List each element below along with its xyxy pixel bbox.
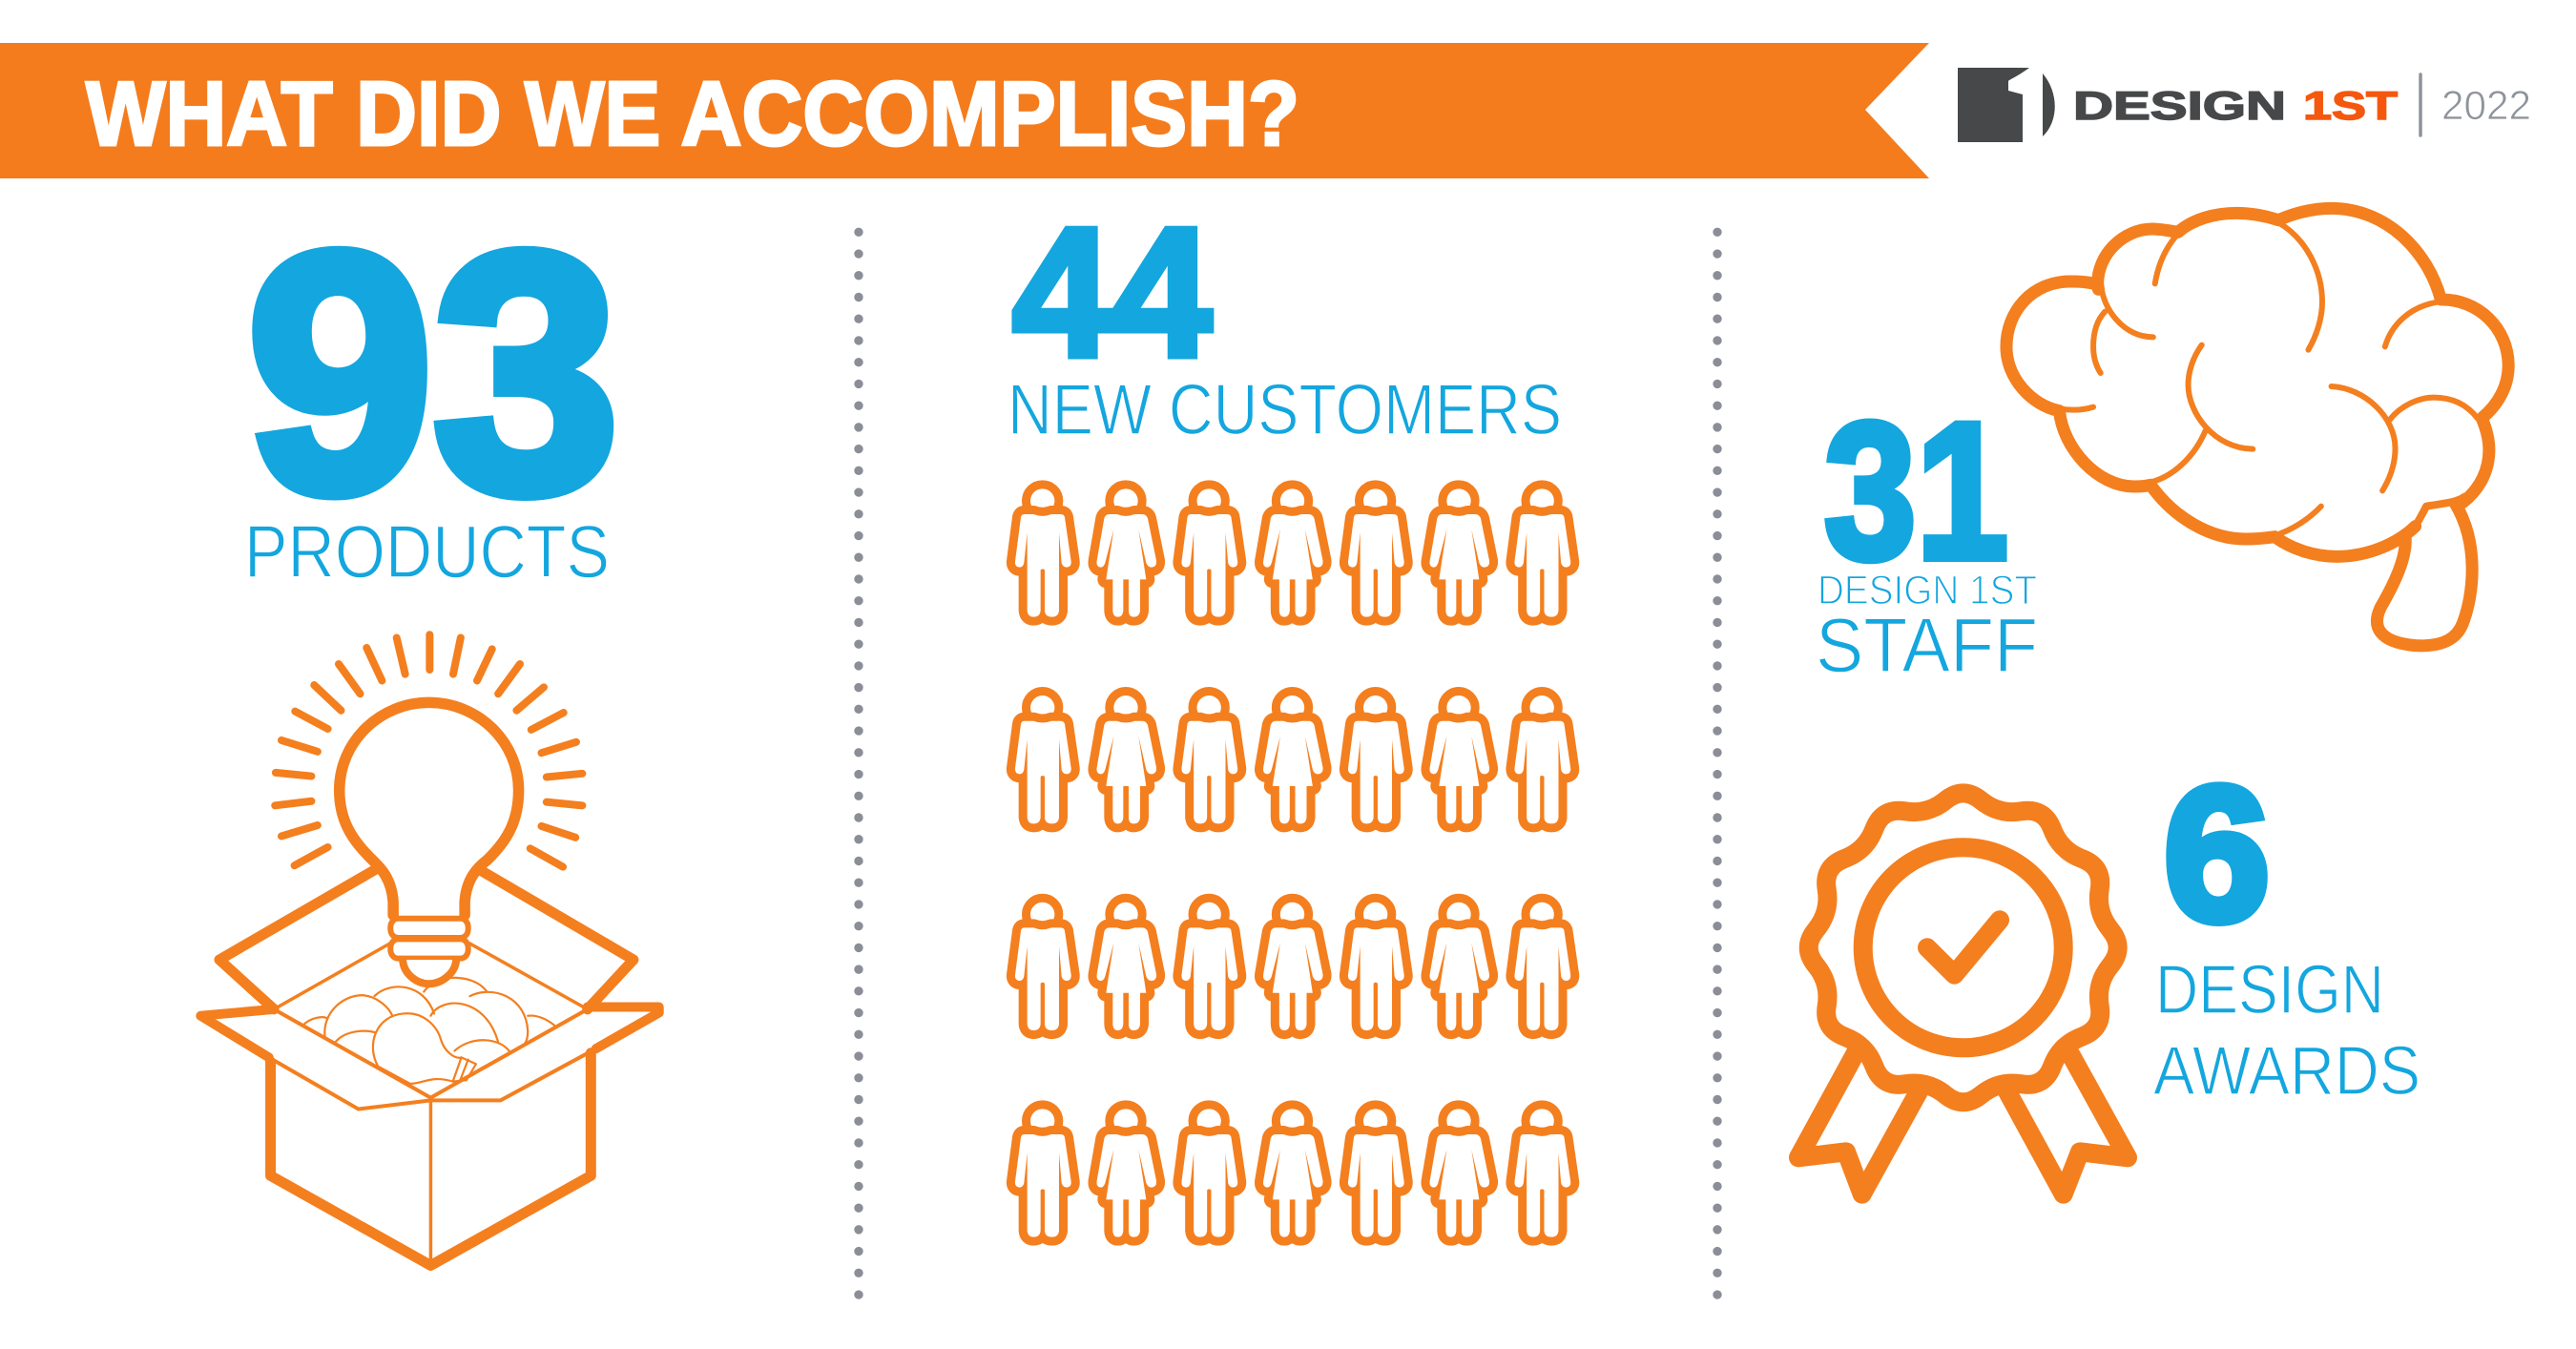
- icon: light bulb in a box: [200, 634, 659, 1265]
- brain stem: [2377, 504, 2472, 646]
- icon: brain: [2006, 208, 2508, 646]
- label: design 1st: DESIGN 1ST: [1818, 568, 2037, 613]
- row 1: [1015, 488, 1570, 617]
- main bulb outline: [340, 702, 519, 915]
- rosette ring: [1863, 847, 2064, 1048]
- row 2: [1015, 695, 1570, 823]
- brain inner folds: [2059, 222, 2478, 533]
- bulb screw base: [390, 919, 468, 984]
- brain outer lobes: [2006, 208, 2508, 556]
- label: products: PRODUCTS: [244, 509, 610, 593]
- label: new customers: NEW CUSTOMERS: [1008, 369, 1562, 449]
- logo year: 2022: [2441, 83, 2531, 129]
- label: design: DESIGN: [2155, 952, 2384, 1028]
- stat: 44: 44: [1012, 189, 1212, 395]
- rosette ribbons: [1798, 1051, 2128, 1194]
- box body: [271, 1053, 591, 1265]
- logo wordmark accent: 1ST: [2303, 83, 2398, 128]
- brain lower lobe edge: [2416, 497, 2464, 527]
- box back flaps: [219, 869, 634, 1009]
- rosette scalloped edge: [1809, 793, 2118, 1102]
- label: awards: AWARDS: [2153, 1033, 2420, 1110]
- banner: [0, 43, 1929, 178]
- check mark: [1927, 920, 2000, 975]
- logo: Design 1st 2022: [1958, 68, 2531, 142]
- box rim and front flaps: [200, 944, 659, 1263]
- stat: 93: 93: [247, 182, 619, 563]
- stat: 6: 6: [2164, 748, 2270, 961]
- logo wordmark: DESIGN: [2073, 83, 2286, 128]
- bulb rays: [275, 634, 582, 867]
- people pictogram: [1015, 488, 1570, 1237]
- icon: award rosette: [1798, 793, 2128, 1194]
- row 3: [1015, 903, 1570, 1030]
- logo mark: [1958, 68, 2055, 142]
- label: staff: STAFF: [1816, 603, 2038, 689]
- row 4: [1015, 1109, 1570, 1237]
- stat: 31: 31: [1824, 383, 2008, 600]
- title: WHAT DID WE ACCOMPLISH?: [86, 63, 1299, 165]
- small bulbs inside box: [304, 978, 555, 1084]
